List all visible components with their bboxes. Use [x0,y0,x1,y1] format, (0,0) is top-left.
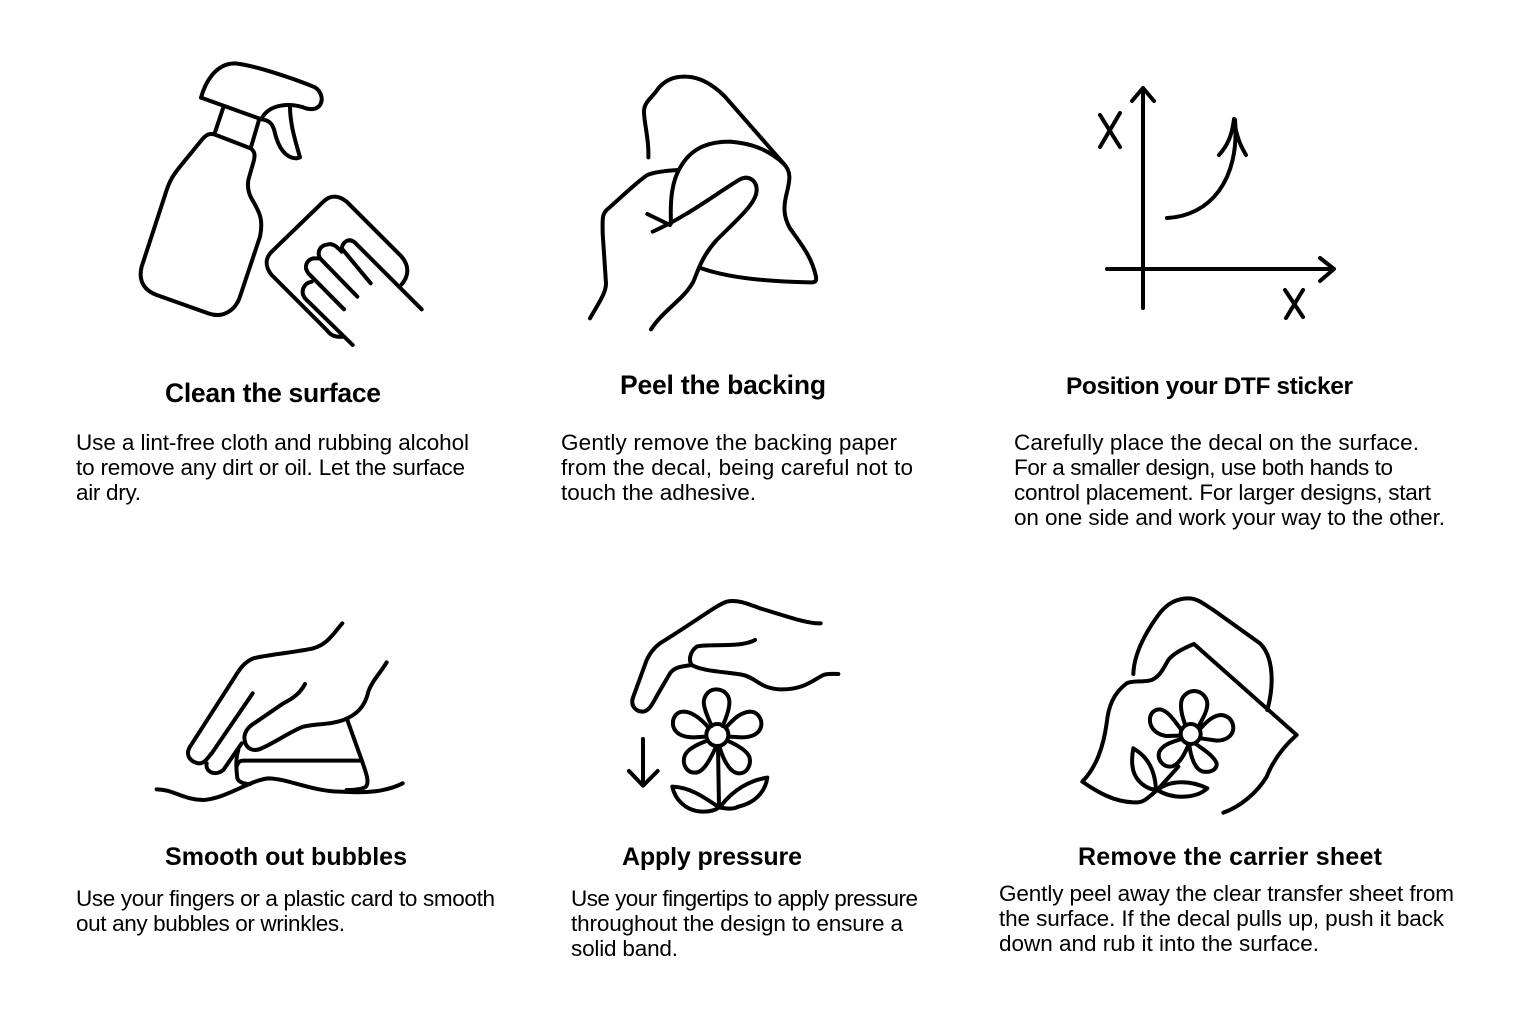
text block: smooth out bubbles: out any bubbles or wrinkles. [76,911,345,936]
text block: apply pressure: throughout the design to ensure a [571,911,903,936]
text block: smooth out bubbles [76,886,495,936]
text block: apply pressure: solid band. [571,936,678,961]
heading: peel the backing: Peel the backing [620,370,826,400]
text block: apply pressure: Use your fingertips to apply pressure [571,886,918,911]
text block: peel the backing: Gently remove the backing paper [561,430,898,455]
heading: position your DTF sticker: Position your DTF sticker [1066,373,1353,400]
text block: clean the surface [76,430,469,505]
heading: apply pressure: Apply pressure [622,843,802,871]
panel: smooth out bubbles [76,623,495,936]
icon: carrier sheet peeling over flower [1082,598,1297,813]
text block: clean the surface: to remove any dirt or oil. Let the surface [76,455,465,480]
heading: remove the carrier sheet: Remove the carrier sheet [1078,843,1383,871]
icon: hand smoothing with card [157,623,403,800]
text block: remove the carrier sheet: the surface. If the decal pulls up, push it back [999,906,1445,931]
text block: position your DTF sticker: For a smaller design, use both hands to [1014,455,1393,480]
panel: clean the surface [76,63,469,505]
text block: clean the surface: air dry. [76,480,141,505]
text block: peel the backing: touch the adhesive. [561,480,756,505]
text block: peel the backing: from the decal, being careful not to [561,455,913,480]
panel: peel the backing [561,77,913,505]
text block: position your DTF sticker [1014,430,1445,530]
panel: position your DTF sticker [1014,88,1445,530]
text block: remove the carrier sheet: down and rub it into the surface. [999,931,1319,956]
text block: clean the surface: Use a lint-free cloth and rubbing alcohol [76,430,469,455]
text block: remove the carrier sheet: Gently peel away the clear transfer sheet from [999,881,1454,906]
text block: position your DTF sticker: Carefully place the decal on the surface. [1014,430,1419,455]
panel: apply pressure [571,601,918,961]
text block: apply pressure [571,886,918,961]
heading: clean the surface: Clean the surface [165,378,381,408]
icon: axes with curved arrow [1100,88,1334,318]
text block: position your DTF sticker: on one side and work your way to the other. [1014,505,1445,530]
text block: remove the carrier sheet [999,881,1454,956]
icon: hand peeling backing [590,77,816,329]
icon: spray bottle and cloth [141,63,422,345]
text block: smooth out bubbles: Use your fingers or a plastic card to smooth [76,886,495,911]
icon: hand pressing flower [629,601,838,812]
text block: position your DTF sticker: control placement. For larger designs, start [1014,480,1432,505]
text block: peel the backing [561,430,913,505]
heading: smooth out bubbles: Smooth out bubbles [165,843,407,871]
panel: remove the carrier sheet [999,598,1454,956]
